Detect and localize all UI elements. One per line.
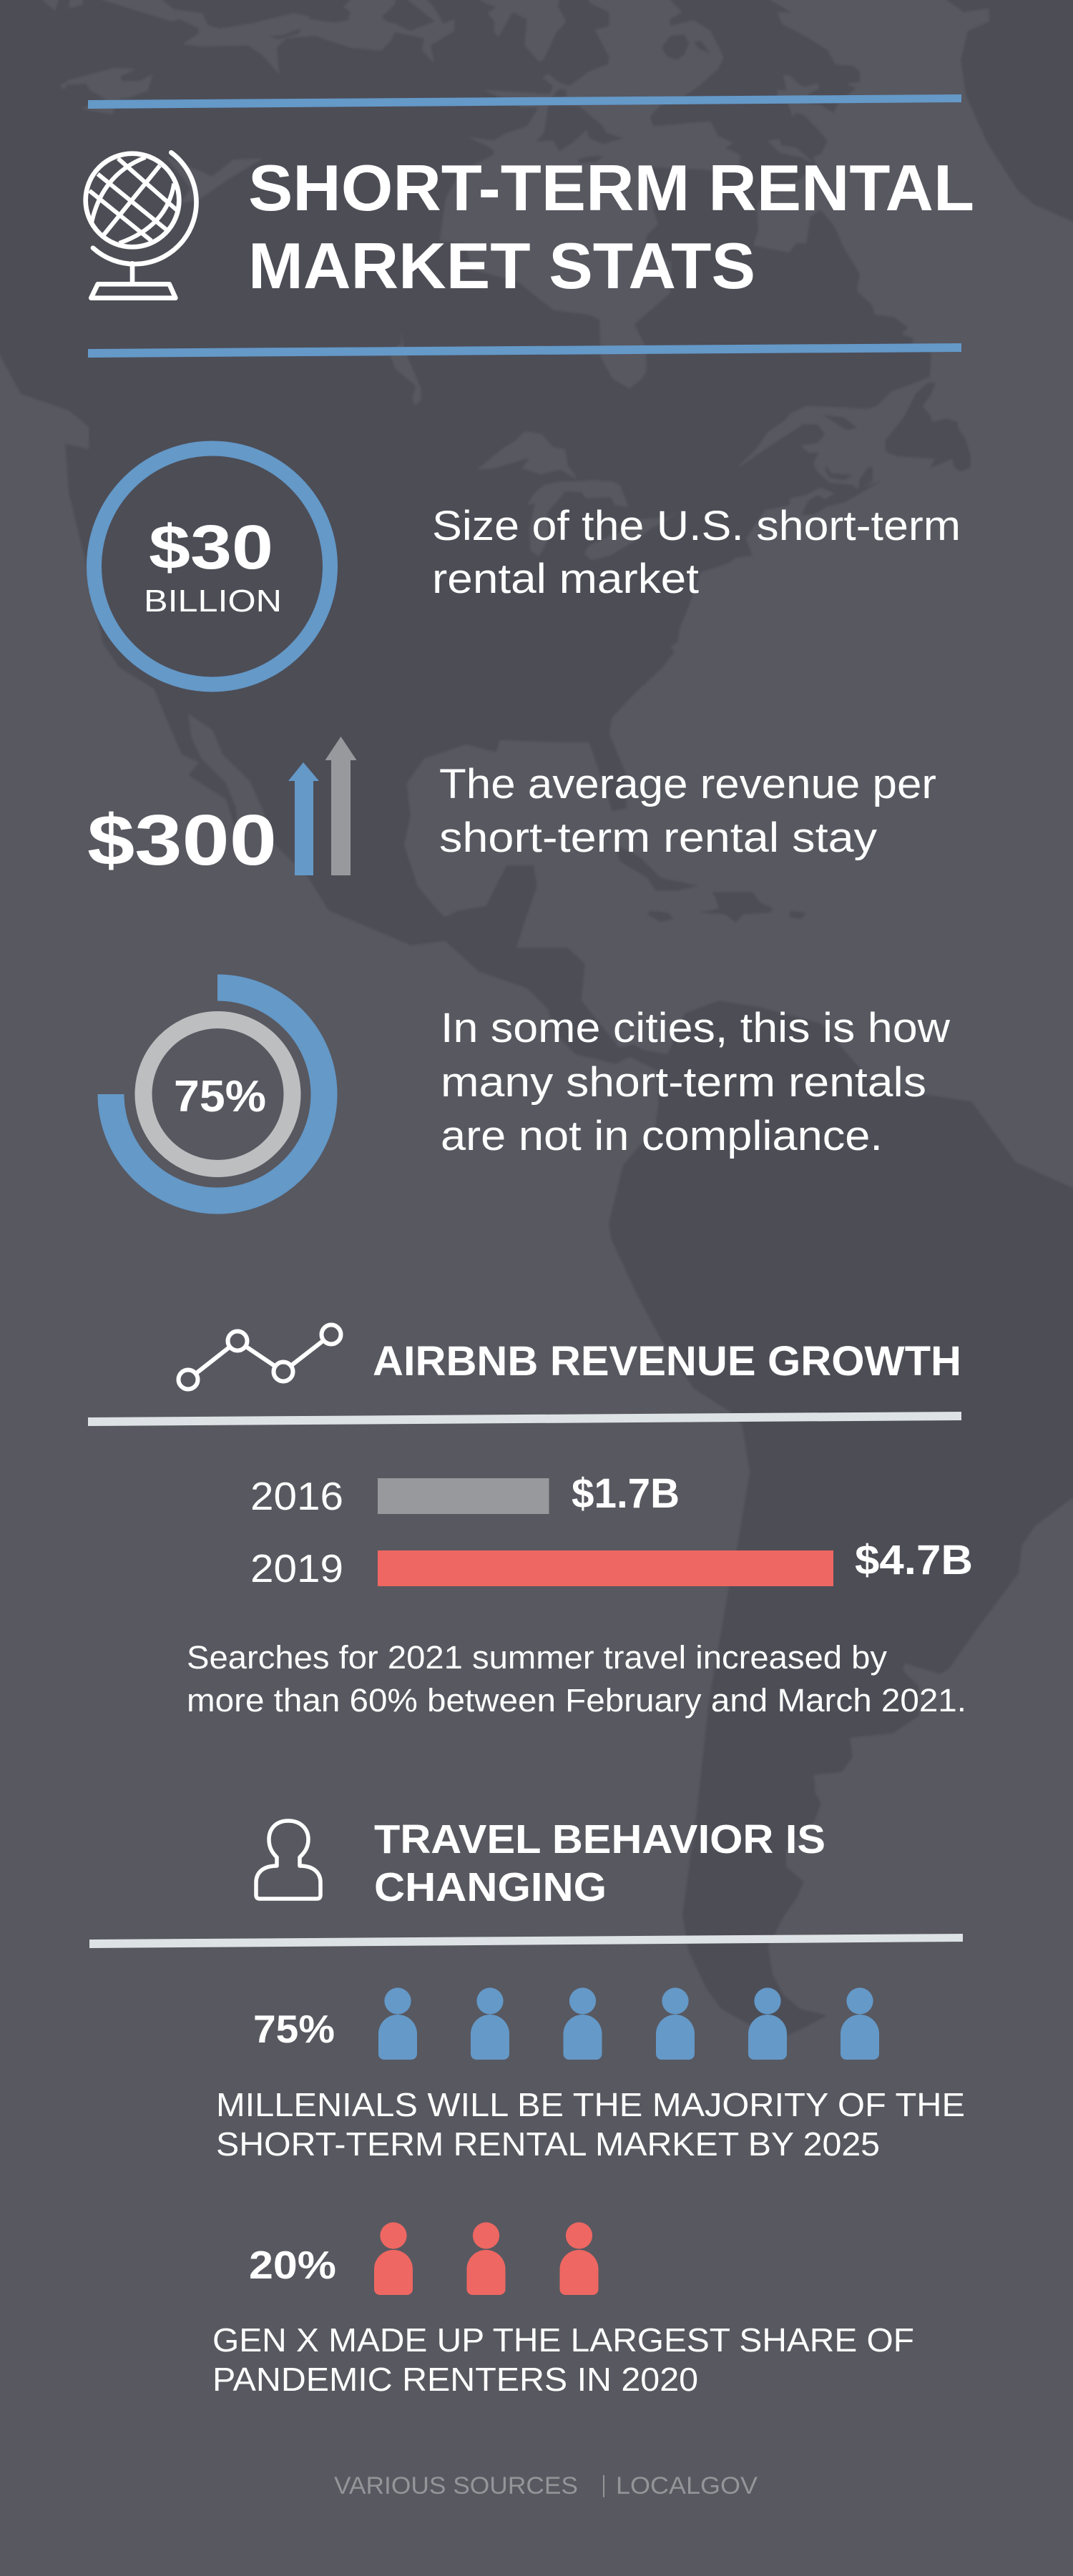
label: billion: BILLION <box>144 584 282 619</box>
label: 2019: 2019 <box>250 1546 343 1591</box>
description: compliance: are not in compliance. <box>441 1113 883 1159</box>
stat: compliance <box>111 988 951 1201</box>
text: summer travel searches: more than 60% between February and March 2021. <box>187 1682 966 1719</box>
pictogram: six blue people <box>378 1987 879 2060</box>
value: 20%: 20% <box>249 2243 336 2287</box>
text: summer travel searches: Searches for 2021 summer travel increased by <box>187 1639 888 1676</box>
pictogram: three red people <box>374 2222 598 2295</box>
heading: travel behavior is changing: CHANGING <box>374 1864 607 1910</box>
value: $300: $300 <box>87 800 277 880</box>
icon: person outline <box>256 1821 320 1899</box>
section rule <box>88 1412 961 1426</box>
heading: Airbnb revenue growth: AIRBNB REVENUE GROWTH <box>373 1338 961 1385</box>
value: $30: $30 <box>149 513 273 582</box>
title <box>248 152 974 303</box>
description: gen x: PANDEMIC RENTERS IN 2020 <box>212 2361 698 2398</box>
description: compliance: many short-term rentals <box>441 1059 926 1106</box>
description: revenue: short-term rental stay <box>439 815 877 861</box>
heading: travel behavior is changing: TRAVEL BEHAVIOR IS <box>374 1817 825 1862</box>
stat: millennials <box>216 1987 965 2163</box>
label: 2016: 2016 <box>250 1474 343 1518</box>
description: gen x: GEN X MADE UP THE LARGEST SHARE OF <box>212 2321 914 2359</box>
icon: blue up arrow <box>288 762 319 875</box>
description: compliance: In some cities, this is how <box>441 1005 951 1051</box>
stat: market size <box>94 448 961 684</box>
footer: sources: VARIOUS SOURCES <box>334 2472 578 2499</box>
title: MARKET STATS <box>248 230 755 303</box>
section rule <box>89 1934 963 1948</box>
description: compliance <box>441 1005 951 1159</box>
description: market size <box>432 503 961 602</box>
value: $1.7B: $1.7B <box>572 1470 680 1517</box>
description: revenue: The average revenue per <box>439 761 936 807</box>
header rule bottom <box>88 343 961 358</box>
bar: 2019 <box>378 1550 833 1586</box>
bar: 2016 <box>378 1478 549 1514</box>
heading: travel behavior is changing <box>374 1817 825 1910</box>
description: market size: rental market <box>432 556 699 602</box>
icon: grey up arrow <box>325 737 356 875</box>
description: market size: Size of the U.S. short-term <box>432 503 961 549</box>
footer: sources <box>334 2472 758 2499</box>
ring: $30 billion <box>94 448 330 684</box>
footer: sources: LOCALGOV <box>616 2472 758 2499</box>
bar chart: revenue <box>250 1470 973 1591</box>
header rule top <box>88 94 961 109</box>
text: summer travel searches <box>187 1639 966 1719</box>
description: millennials: MILLENIALS WILL BE THE MAJORITY OF THE <box>216 2086 965 2123</box>
value: 75%: 75% <box>253 2007 335 2051</box>
value: 75%: 75% <box>174 1072 266 1121</box>
icon: globe <box>86 152 197 298</box>
description: millennials <box>216 2086 965 2163</box>
title: SHORT-TERM RENTAL <box>248 152 974 225</box>
stat: average revenue <box>87 737 936 880</box>
stat: gen x <box>212 2222 914 2398</box>
description: gen x <box>212 2321 914 2398</box>
description: millennials: SHORT-TERM RENTAL MARKET BY 2025 <box>216 2125 880 2163</box>
value: $4.7B: $4.7B <box>855 1537 973 1583</box>
donut chart 75% <box>111 988 324 1201</box>
icon: line chart <box>179 1324 340 1389</box>
description: revenue <box>439 761 936 861</box>
